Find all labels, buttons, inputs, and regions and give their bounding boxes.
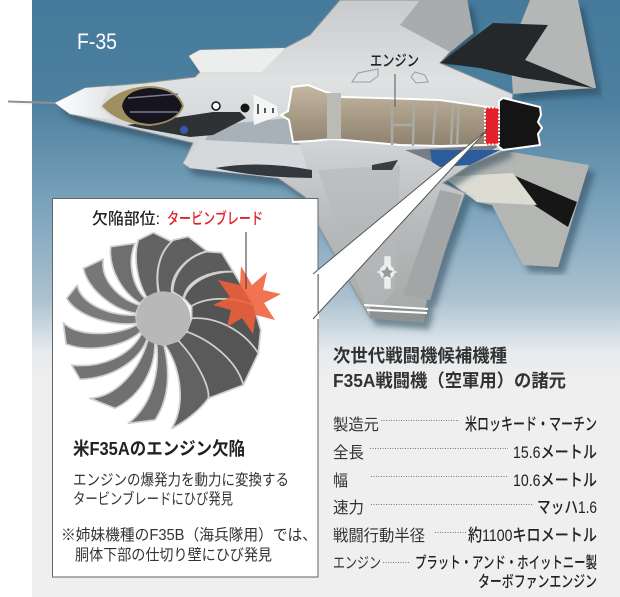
engine ribs bbox=[327, 93, 459, 146]
cockpit canopy bbox=[102, 86, 188, 134]
specs heading bbox=[333, 345, 566, 391]
dark upper tail fin bbox=[440, 23, 593, 88]
panel: engine defect bbox=[52, 198, 318, 577]
row: engine: エンジン bbox=[333, 555, 381, 572]
turbine illustration bbox=[63, 233, 261, 428]
row: length: 15.6メートル bbox=[513, 443, 597, 462]
lower tailplane bbox=[440, 150, 589, 267]
row: width: 幅 bbox=[333, 472, 348, 490]
specs table bbox=[333, 415, 597, 591]
upper tailplane bbox=[510, 0, 596, 94]
row: width: 10.6メートル bbox=[513, 471, 597, 490]
engine label bbox=[370, 53, 419, 107]
row: speed bbox=[333, 498, 597, 517]
hub bbox=[136, 291, 190, 345]
row: length: 全長 bbox=[333, 444, 364, 462]
row: maker bbox=[333, 415, 597, 434]
panel description: エンジンの爆発力を動力に変換する bbox=[73, 471, 289, 489]
F-35 aircraft illustration bbox=[8, 0, 596, 322]
roundel bbox=[377, 257, 397, 288]
red turbine blade section bbox=[485, 108, 499, 144]
panel note bbox=[61, 526, 317, 564]
panel description bbox=[73, 471, 289, 508]
defect location heading bbox=[92, 209, 263, 228]
panel text bbox=[61, 438, 317, 564]
row: maker: 製造元 bbox=[333, 416, 379, 434]
defect location heading: タービンブレード bbox=[167, 209, 263, 228]
row: speed: マッハ1.6 bbox=[537, 498, 597, 517]
specs heading: F35A戦闘機（空軍用）の諸元 bbox=[333, 370, 566, 391]
row: combat radius: 戦闘行動半径 bbox=[333, 527, 425, 545]
row: length bbox=[333, 443, 597, 462]
aircraft name: F-35 bbox=[77, 29, 117, 54]
blue engine bay bbox=[430, 150, 500, 167]
panel note: 胴体下部の仕切り壁にひび発見 bbox=[75, 546, 272, 564]
panel description: タービンブレードにひび発見 bbox=[73, 489, 233, 508]
row: width bbox=[333, 471, 597, 490]
defect location heading: 欠陥部位: bbox=[92, 209, 160, 228]
specs heading: 次世代戦闘機候補機種 bbox=[333, 345, 507, 366]
engine casing bbox=[281, 85, 488, 146]
row: engine bbox=[333, 554, 597, 591]
defect leader line bbox=[245, 232, 247, 289]
nose probe bbox=[8, 100, 55, 104]
engine label: エンジン bbox=[370, 53, 419, 70]
panel note: ※姉妹機種のF35B（海兵隊用）では、 bbox=[61, 526, 317, 544]
fuselage and wings bbox=[55, 0, 513, 322]
callout wedge bbox=[313, 130, 487, 319]
engine nozzle bbox=[498, 98, 542, 150]
engine cutaway bbox=[281, 85, 542, 150]
defect star marker bbox=[213, 266, 281, 334]
panel heading: 米F35Aのエンジン欠陥 bbox=[73, 438, 245, 459]
intake and ports bbox=[212, 94, 278, 125]
row: combat radius: 約1100キロメートル bbox=[468, 526, 597, 545]
blades bbox=[63, 233, 261, 428]
row: combat radius bbox=[333, 526, 597, 545]
row: speed: 速力 bbox=[333, 499, 364, 517]
